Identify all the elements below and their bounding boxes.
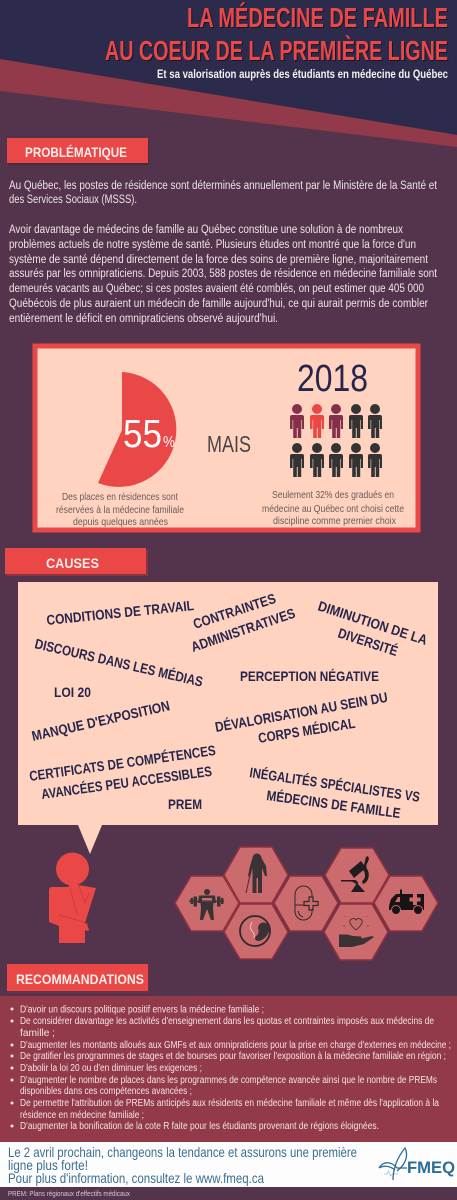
causes word cloud: PERCEPTION NÉGATIVE [240,668,379,684]
causes word cloud: ADMINISTRATIVES [189,605,297,655]
call to action text: ligne plus forte! [8,1157,88,1173]
text: mais: MAIS [207,431,251,457]
icon: embryo [240,916,270,946]
icon: heart in hand [339,916,374,947]
list of recommendations: D'avoir un discours politique positif envers la médecine familiale ; [20,1004,264,1016]
title [105,2,448,66]
text: 32% des gradués [262,489,404,527]
text: places en résidences: réservées à la médecine familiale [56,504,184,516]
pictogram: 10 graduates [290,404,382,477]
heading: problématique [7,138,149,165]
list of recommendations: D'augmenter la bonification de la cote R faite pour les étudiants provenant de régions éloignées. [20,1121,379,1132]
call to action text [8,1144,357,1186]
hexagon icon cluster [175,847,438,960]
header background [0,0,457,135]
pie chart: 55% [98,372,176,487]
text: 32% des gradués: Seulement 32% des gradués en [272,489,394,501]
causes word cloud: CONDITIONS DE TRAVAIL [46,597,195,628]
text: 2018: 2018 [297,358,368,400]
causes word cloud [28,590,429,821]
causes word cloud: CONTRAINTES [191,590,278,632]
causes word cloud: DÉVALORISATION AU SEIN DU [214,689,389,735]
logo: FMEQ [379,1148,455,1180]
text block: problématique: Avoir davantage de médecins de famille au Québec constitue une solution à de nombreux [9,224,403,236]
causes word cloud: AVANCÉES PEU ACCESSIBLES [40,763,213,802]
diagonal band [0,59,457,147]
list of recommendations [20,1004,451,1132]
call to action text: Pour plus d'information, consultez le www.fmeq.ca [8,1170,264,1186]
causes word cloud: LOI 20 [54,684,91,700]
heading: recommandations: RECOMMANDATIONS [16,971,144,987]
call to action text: Le 2 avril prochain, changeons la tendance et assurons une première [8,1144,357,1160]
causes word cloud: MÉDECINS DE FAMILLE [266,787,402,821]
list of recommendations: famille ; [20,1028,55,1039]
causes word cloud: CORPS MÉDICAL [257,715,357,746]
pie chart: 55%: 55 [123,413,162,456]
list of recommendations: D'abolir la loi 20 ou d'en diminuer les exigences ; [20,1063,202,1074]
causes word cloud: DISCOURS DANS LES MÉDIAS [33,635,205,690]
causes word cloud: DIVERSITÉ [336,625,400,659]
heading: problématique: PROBLÉMATIQUE [25,144,127,160]
icon: microscope [341,856,369,892]
causes word cloud: MANQUE D'EXPOSITION [30,697,171,744]
heading: causes [5,548,148,576]
footnote: PREM: Plans régionaux d'effectifs médicaux [8,1189,130,1198]
list of recommendations: résidence en médecine familiale ; [20,1110,144,1121]
pie chart: 55%: % [163,434,175,451]
text: places en résidences: depuis quelques années [73,516,168,528]
logo: FMEQ: FMEQ [407,1158,455,1177]
call to action band [0,1142,457,1187]
icon: weightlifter [189,889,224,920]
icon: pill [295,886,318,920]
list of recommendations: disponibles dans ces compétences avancées ; [20,1086,192,1097]
icon: elderly person [246,854,267,893]
speech bubble: causes [18,582,438,854]
text block: problématique [9,180,438,325]
causes word cloud: PREM [168,796,202,812]
text block: problématique: des Services Sociaux (MSSS). [9,194,137,206]
causes word cloud: DIMINUTION DE LA [316,598,429,648]
text: 32% des gradués: médecine au Québec ont choisi cette [262,503,404,515]
panel: recommandations [0,996,457,1142]
panel: statistics [35,346,418,530]
text block: problématique: entièrement le déficit en omnipraticiens observé aujourd'hui. [9,313,278,325]
text: places en résidences: Des places en résidences sont [62,491,178,503]
causes word cloud: CERTIFICATS DE COMPÉTENCES [28,742,217,784]
icon: thinking person [49,852,96,943]
heading: causes: CAUSES [46,555,99,571]
text: places en résidences [56,491,184,528]
text: 32% des gradués: discipline comme premier choix [273,515,397,527]
causes word cloud: INÉGALITÉS SPÉCIALISTES VS [249,764,421,805]
bullets [10,1008,14,1128]
icon: ambulance [389,890,424,914]
heading: recommandations [7,964,149,993]
